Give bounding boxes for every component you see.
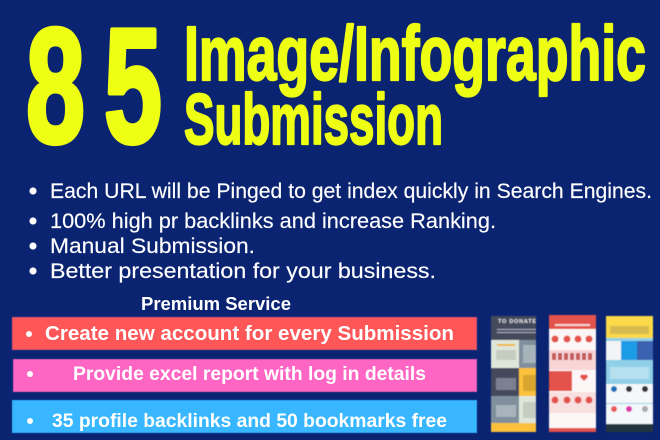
bullet list: benefits: 100% high pr backlinks and increase Ranking.: [50, 210, 496, 233]
thumbnail: blood donor infographic: [549, 315, 596, 432]
heading: Premium Service: Premium Service: [141, 294, 291, 314]
bullet list: benefits: Each URL will be Pinged to get index quickly in Search Engines.: [50, 180, 652, 203]
bullet list: benefits: Manual Submission.: [50, 235, 255, 258]
heading: 85 numeral: [26, 0, 162, 177]
bullet list: benefits: [30, 180, 652, 283]
thumbnail: donate infographic: [491, 316, 536, 432]
banner: excel report: Provide excel report with log in details: [73, 363, 426, 385]
bullet list: benefits: Better presentation for your business.: [50, 260, 436, 283]
heading: Image/Infographic Submission: Submission: [184, 81, 443, 160]
thumbnail: leads infographic: [606, 316, 653, 432]
banner: excel report: [13, 359, 477, 392]
banner: create new account: [12, 317, 477, 350]
banner: create new account: Create new account for every Submission: [45, 322, 454, 345]
banner: profile backlinks: [12, 400, 477, 433]
thumbnail: donate infographic: TO DONATE: [498, 319, 536, 325]
banner: profile backlinks: 35 profile backlinks and 50 bookmarks free: [52, 410, 447, 432]
heading: Image/Infographic Submission: [184, 11, 646, 160]
